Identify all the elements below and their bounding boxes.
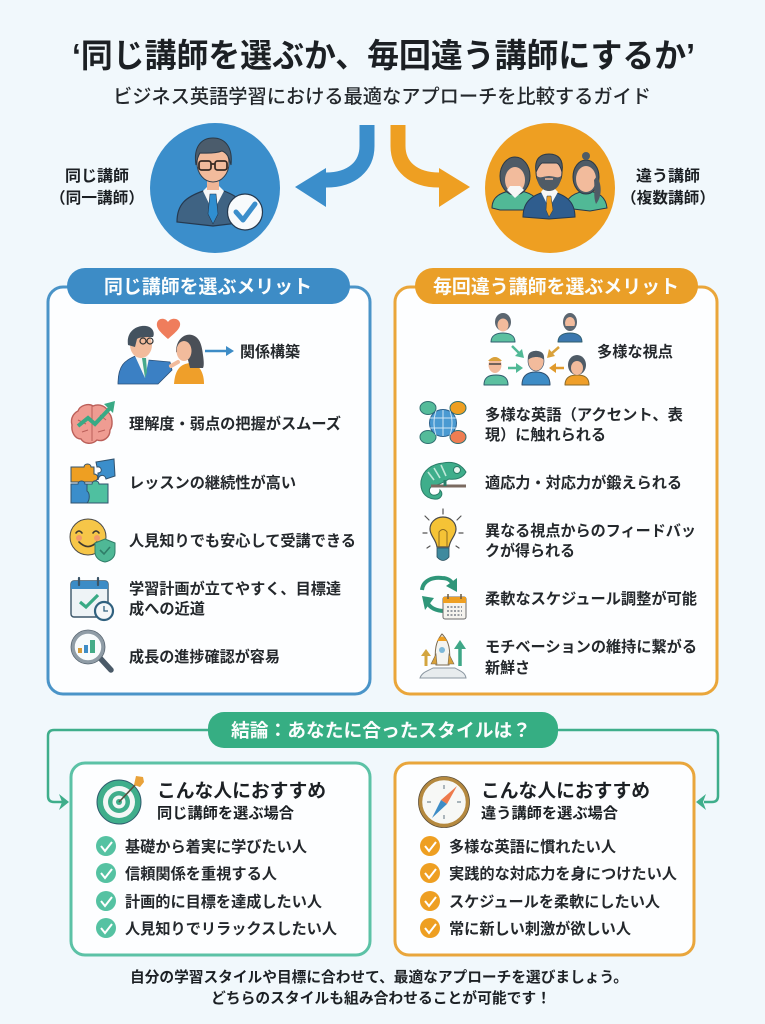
panel: recommended for same teacher [71, 763, 370, 955]
text: planning: 成への近道 [129, 600, 205, 618]
icon: compass [418, 776, 470, 828]
text: continuity: レッスンの継続性が高い [129, 474, 296, 492]
text: relationship building: 関係構築 [240, 343, 300, 361]
arrow: to relationship building [205, 346, 234, 356]
text: diverse perspectives: 多様な視点 [597, 343, 673, 361]
heading: same teacher merits: 同じ講師を選ぶメリット [104, 276, 312, 298]
subheading: 同じ講師を選ぶ場合 [157, 804, 294, 822]
checklist: different teachers: 多様な英語に慣れたい人 [449, 838, 616, 856]
checklist: same teacher: 計画的に目標を達成したい人 [125, 893, 322, 911]
label: same teacher: 同じ講師 [65, 166, 129, 185]
text: diverse english [485, 406, 683, 444]
icon: different teachers circle [485, 123, 615, 253]
label: different teachers: （複数講師） [621, 188, 715, 207]
checklist: same teacher: 信頼関係を重視する人 [125, 865, 277, 883]
icon: target [97, 776, 144, 824]
icon: light bulb [423, 509, 463, 560]
panel: same teacher merits [48, 268, 370, 694]
icon: smile and shield [70, 519, 115, 562]
icon: same teacher circle [150, 123, 280, 253]
icon: globe and speech bubbles [420, 402, 466, 444]
title: ‘同じ講師を選ぶか、毎回違う講師にするか’ [72, 37, 695, 74]
subheading: 違う講師を選ぶ場合 [481, 804, 618, 822]
text: motivation [485, 638, 697, 677]
text: feedback: クが得られる [485, 542, 575, 560]
arrow: orange [398, 125, 470, 207]
text: progress: 成長の進捗確認が容易 [129, 648, 280, 666]
heading: same teacher merits [67, 268, 350, 304]
icon: relationship couple [118, 319, 204, 384]
heading: conclusion [208, 712, 558, 748]
checklist: same teacher [96, 836, 337, 938]
text: feedback: 異なる視点からのフィードバッ [485, 522, 696, 540]
panel: recommended for different teachers [395, 763, 694, 955]
text: adaptability: 適応力・対応力が鍛えられる [485, 474, 682, 492]
label: same teacher [50, 166, 144, 207]
heading: conclusion: 結論：あなたに合ったスタイルは？ [231, 720, 531, 741]
text: planning [129, 580, 341, 618]
icon: brain [71, 401, 115, 443]
text: planning: 学習計画が立てやすく、目標達 [129, 580, 341, 598]
arrow: blue [295, 125, 367, 207]
text: feedback [485, 522, 696, 560]
icon: chameleon [421, 462, 466, 499]
text: diverse english: 現）に触れられる [485, 427, 606, 444]
heading: recommended: こんな人におすすめ [481, 780, 650, 801]
subtitle: ビジネス英語学習における最適なアプローチを比較するガイド [113, 86, 651, 108]
icon: diverse perspectives network [484, 313, 589, 385]
label: same teacher: （同一講師） [50, 188, 144, 207]
icon: magnifier [71, 630, 111, 670]
text: diverse english: 多様な英語（アクセント、表 [485, 406, 683, 424]
checklist: same teacher: 人見知りでリラックスしたい人 [125, 920, 337, 938]
icon: calendar and clock [71, 578, 113, 620]
label: different teachers: 違う講師 [636, 166, 700, 185]
closing message [130, 968, 628, 1007]
text: flexible schedule: 柔軟なスケジュール調整が可能 [485, 590, 697, 608]
text: understanding: 理解度・弱点の把握がスムーズ [129, 415, 341, 433]
heading: recommended: こんな人におすすめ [157, 780, 326, 801]
icon: rocket [420, 634, 466, 678]
icon: schedule arrows and calendar [422, 578, 466, 619]
heading: different teacher merits [415, 268, 698, 304]
checklist: different teachers [420, 836, 677, 938]
heading: different teacher merits: 毎回違う講師を選ぶメリット [433, 275, 679, 298]
closing message: どちらのスタイルも組み合わせることが可能です！ [211, 989, 551, 1007]
checklist: different teachers: 常に新しい刺激が欲しい人 [449, 920, 631, 938]
checklist: same teacher: 基礎から着実に学びたい人 [125, 838, 307, 856]
text: shy: 人見知りでも安心して受講できる [129, 532, 356, 550]
closing message: 自分の学習スタイルや目標に合わせて、最適なアプローチを選びましょう。 [130, 968, 628, 986]
label: different teachers [621, 166, 715, 207]
connector: conclusion to left [48, 730, 208, 810]
checklist: different teachers: スケジュールを柔軟にしたい人 [449, 893, 660, 911]
panel: different teacher merits [395, 268, 717, 694]
connector: conclusion to right [558, 730, 718, 810]
text: motivation: 新鮮さ [485, 660, 530, 677]
checklist: different teachers: 実践的な対応力を身につけたい人 [449, 865, 677, 883]
text: motivation: モチベーションの維持に繋がる [485, 638, 697, 656]
icon: puzzle [71, 459, 115, 503]
